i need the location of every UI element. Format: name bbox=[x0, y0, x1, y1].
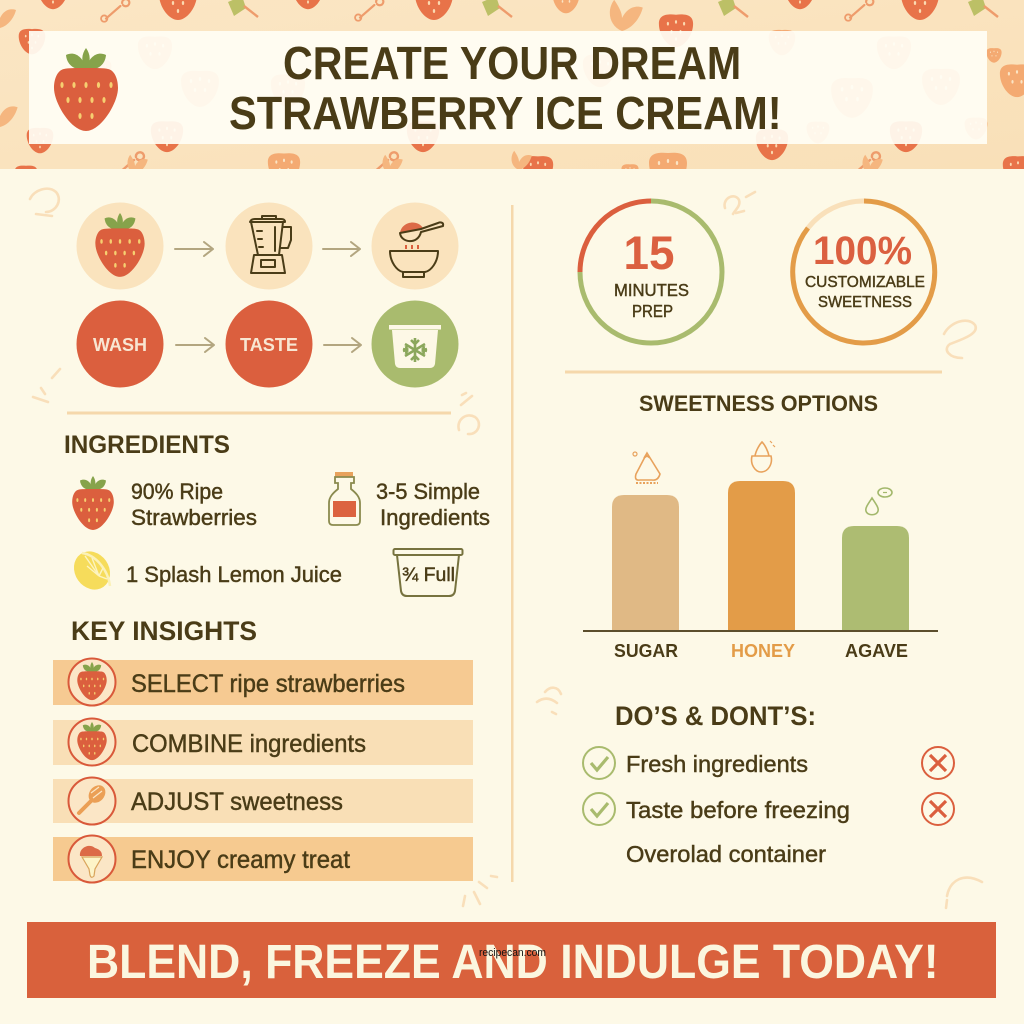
text: ripe strawberries: 90% Ripe bbox=[131, 479, 223, 504]
bar: sugar: SUGAR bbox=[614, 641, 678, 661]
text: ripe strawberries: Strawberries bbox=[131, 505, 257, 530]
ingredients list bbox=[67, 472, 490, 597]
stat: 15 minutes prep bbox=[580, 201, 722, 343]
stat: 15 minutes prep: 15 bbox=[624, 226, 674, 279]
stat: 100% customizable sweetness bbox=[793, 201, 935, 343]
step circle: scoop and bowl bbox=[372, 202, 458, 290]
text: simple ingredients: Ingredients bbox=[380, 505, 490, 530]
text: simple ingredients bbox=[376, 479, 490, 530]
icon: bottle bbox=[329, 472, 360, 525]
step circle: freezer tub bbox=[372, 300, 458, 388]
bar: honey: HONEY bbox=[731, 641, 795, 661]
insight: adjust bbox=[53, 778, 473, 824]
heading: ingredients: INGREDIENTS bbox=[64, 431, 230, 459]
chart baseline bbox=[583, 630, 938, 632]
arrow bbox=[323, 242, 360, 256]
heading: do's and don'ts: DO’S & DONT’S: bbox=[615, 701, 816, 731]
text: simple ingredients: 3-5 Simple bbox=[376, 479, 480, 504]
insight: select bbox=[53, 658, 473, 706]
title: STRAWBERRY ICE CREAM! bbox=[229, 88, 782, 139]
key insights list bbox=[53, 658, 473, 882]
heading: key insights: KEY INSIGHTS bbox=[71, 616, 257, 646]
header band with strawberry pattern bbox=[0, 0, 1024, 169]
insight: combine bbox=[53, 718, 473, 766]
step circle: taste bbox=[226, 300, 312, 388]
left divider bbox=[67, 412, 451, 414]
text: overload container: Overolad container bbox=[626, 841, 826, 867]
step circle: strawberry bbox=[76, 202, 164, 290]
title panel bbox=[29, 31, 987, 144]
insight: enjoy bbox=[53, 836, 473, 882]
icon: three-quarter full tub bbox=[394, 549, 462, 596]
icon: check bbox=[583, 747, 615, 779]
panel: process steps bbox=[76, 202, 458, 388]
right divider bbox=[565, 370, 942, 374]
insight: enjoy: ENJOY creamy treat bbox=[131, 846, 350, 874]
step circle: wash: WASH bbox=[93, 335, 147, 355]
stat: 100% customizable sweetness: 100% bbox=[813, 229, 912, 273]
insight: adjust: ADJUST sweetness bbox=[131, 788, 343, 816]
insight: combine: COMBINE ingredients bbox=[132, 730, 366, 758]
text: taste before freezing: Taste before freezing bbox=[626, 797, 850, 823]
bar chart: sweetness options bbox=[583, 441, 938, 661]
icon: cross bbox=[922, 747, 954, 779]
footer banner: BLEND, FREEZE AND INDULGE TODAY! bbox=[87, 934, 939, 988]
decorative doodles bbox=[30, 189, 982, 908]
icon: ripe strawberry bbox=[72, 476, 114, 530]
title: CREATE YOUR DREAM bbox=[283, 38, 741, 90]
bar: agave bbox=[842, 488, 909, 661]
text: lemon juice: 1 Splash Lemon Juice bbox=[126, 562, 342, 587]
arrow bbox=[324, 338, 361, 352]
arrow bbox=[176, 338, 214, 352]
step circle: wash bbox=[76, 300, 164, 388]
step circle: blender bbox=[226, 202, 312, 290]
bar: agave: AGAVE bbox=[845, 641, 908, 661]
icon: title strawberry bbox=[54, 48, 118, 131]
icon: check bbox=[583, 793, 615, 825]
do's and don'ts list bbox=[583, 747, 954, 867]
bar: honey bbox=[728, 441, 795, 661]
icon: lemon bbox=[67, 544, 117, 597]
text: fresh ingredients: Fresh ingredients bbox=[626, 751, 808, 777]
stat: 15 minutes prep: MINUTES bbox=[614, 280, 689, 300]
icon: cross bbox=[922, 793, 954, 825]
bar: sugar bbox=[612, 452, 679, 661]
vertical divider bbox=[511, 205, 514, 882]
step circle: taste: TASTE bbox=[240, 335, 298, 355]
stat: 100% customizable sweetness: CUSTOMIZABLE bbox=[805, 274, 925, 291]
watermark: recipecan.com bbox=[479, 947, 546, 959]
stat: 100% customizable sweetness: SWEETNESS bbox=[818, 294, 912, 311]
icon: three-quarter full tub: ¾ Full bbox=[402, 565, 455, 586]
stat: 15 minutes prep: PREP bbox=[632, 301, 673, 321]
heading: sweetness options: SWEETNESS OPTIONS bbox=[639, 391, 878, 416]
arrow bbox=[175, 242, 213, 256]
text: ripe strawberries bbox=[131, 479, 257, 530]
insight: select: SELECT ripe strawberries bbox=[131, 670, 405, 698]
footer banner bbox=[27, 922, 996, 998]
title bbox=[229, 38, 782, 139]
